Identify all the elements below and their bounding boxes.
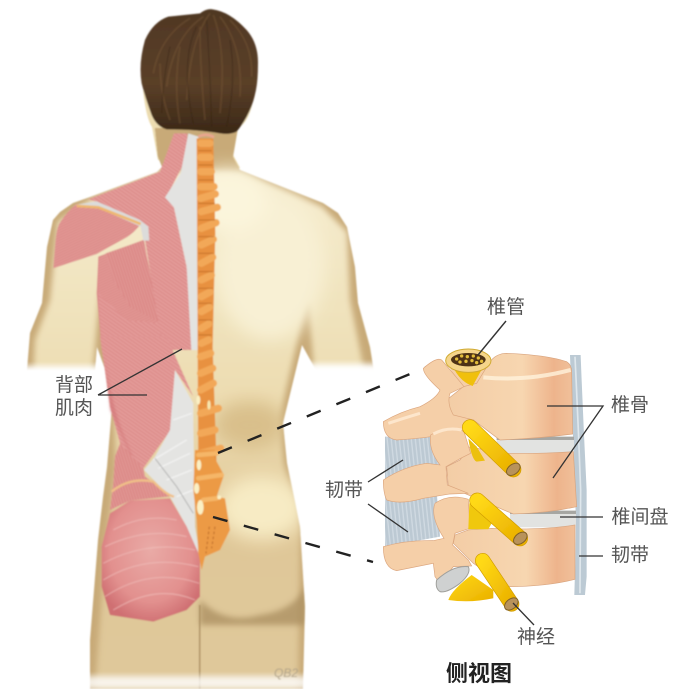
- neck fascia: [165, 133, 199, 350]
- vertebra 2: [383, 428, 577, 514]
- spinal canal: [446, 349, 491, 386]
- spine column: [197, 135, 221, 514]
- label: ligament right: [579, 544, 649, 566]
- infraspinatus: [106, 240, 158, 322]
- vertebra 1: [383, 353, 573, 440]
- label: vertebra: 椎骨: [611, 394, 649, 416]
- vertebra 3: [383, 497, 575, 587]
- label: vertebra: [547, 394, 649, 478]
- intervertebral discs: [497, 437, 576, 527]
- label: ligament right: 韧带: [611, 544, 649, 566]
- lamina cut end: [436, 566, 469, 592]
- lumbar fascia: [144, 370, 201, 560]
- sacrum and lower vertebrae: [193, 395, 230, 570]
- dashed line: lower zoom guide: [213, 517, 373, 562]
- bottom and arm fades: [0, 364, 402, 689]
- interspinous ligaments: [385, 437, 442, 547]
- iliac crest: [112, 480, 174, 497]
- back muscles, lower: [100, 337, 201, 622]
- external oblique: [110, 443, 173, 510]
- side-view spine detail: [383, 349, 587, 613]
- label: back muscles: [55, 349, 182, 419]
- teres: [98, 253, 160, 350]
- deltoid: [53, 204, 140, 268]
- label: nerve: 神经: [517, 626, 555, 648]
- trapezius: [88, 133, 194, 350]
- label: intervertebral disc: 椎间盘: [611, 506, 669, 528]
- caption: side view: 侧视图: [446, 661, 512, 686]
- gluteus: [102, 498, 200, 622]
- signature: QB2: [274, 666, 298, 680]
- label: back muscles: 肌肉: [55, 397, 93, 419]
- label: spinal canal: [478, 296, 525, 355]
- label: spinal canal: 椎管: [487, 296, 525, 318]
- ears and neck skin: [143, 90, 254, 168]
- label: intervertebral disc: [560, 506, 669, 528]
- latissimus: [100, 337, 193, 473]
- body skin: [26, 127, 374, 689]
- scapular spine: [75, 201, 149, 241]
- nerve roots: [468, 427, 529, 613]
- label: ligament left: [325, 460, 408, 532]
- spinal cord: [448, 575, 493, 601]
- back muscles, upper: [53, 133, 199, 350]
- figure: back view of the man: [26, 8, 374, 689]
- label: ligament left: 韧带: [325, 479, 363, 501]
- dashed line: upper zoom guide: [218, 367, 427, 453]
- label: nerve: [513, 603, 555, 648]
- label: back muscles: 背部: [55, 374, 93, 396]
- hair: [141, 9, 258, 134]
- latissimus and lower muscle group base: [97, 240, 167, 350]
- front ligament strip: [570, 355, 587, 595]
